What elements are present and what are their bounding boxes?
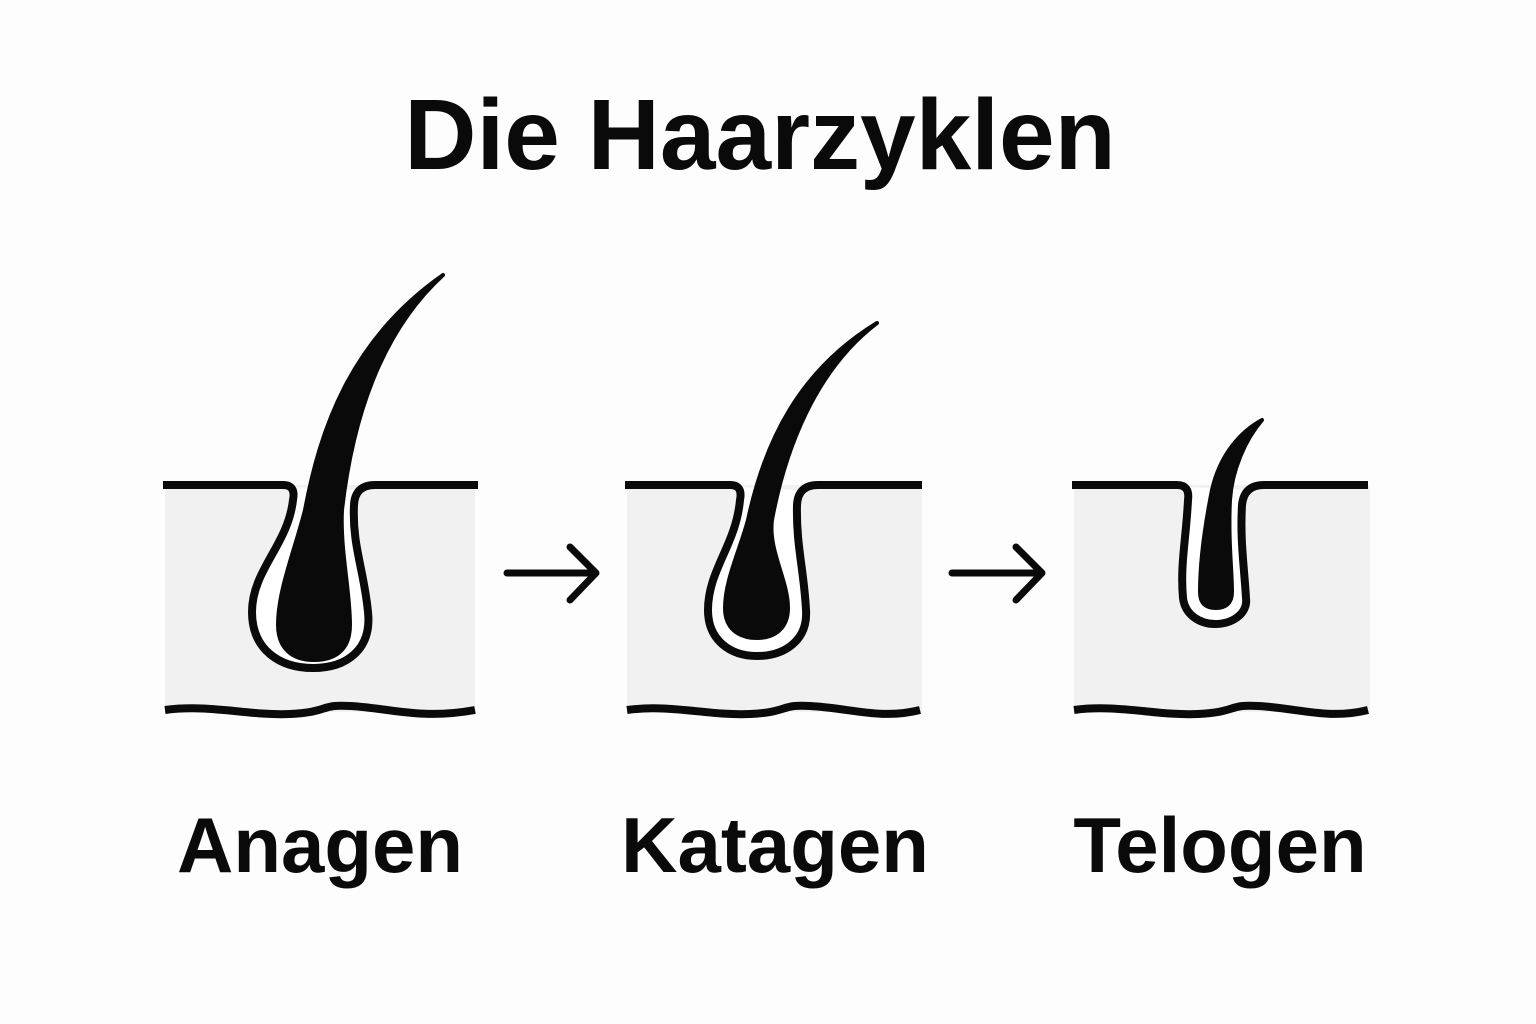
hair bbox=[1200, 420, 1262, 608]
label: katagen: Katagen bbox=[621, 801, 929, 889]
panel: telogen bbox=[1072, 420, 1370, 714]
arrow 2 bbox=[952, 547, 1042, 600]
label: telogen: Telogen bbox=[1073, 801, 1367, 889]
panel: katagen bbox=[625, 323, 922, 714]
label: anagen: Anagen bbox=[177, 801, 463, 889]
arrow 1 bbox=[507, 547, 596, 600]
hair bbox=[725, 323, 877, 638]
hair bbox=[278, 275, 443, 660]
title: Die Haarzyklen bbox=[404, 79, 1116, 191]
panel: anagen bbox=[163, 275, 478, 714]
